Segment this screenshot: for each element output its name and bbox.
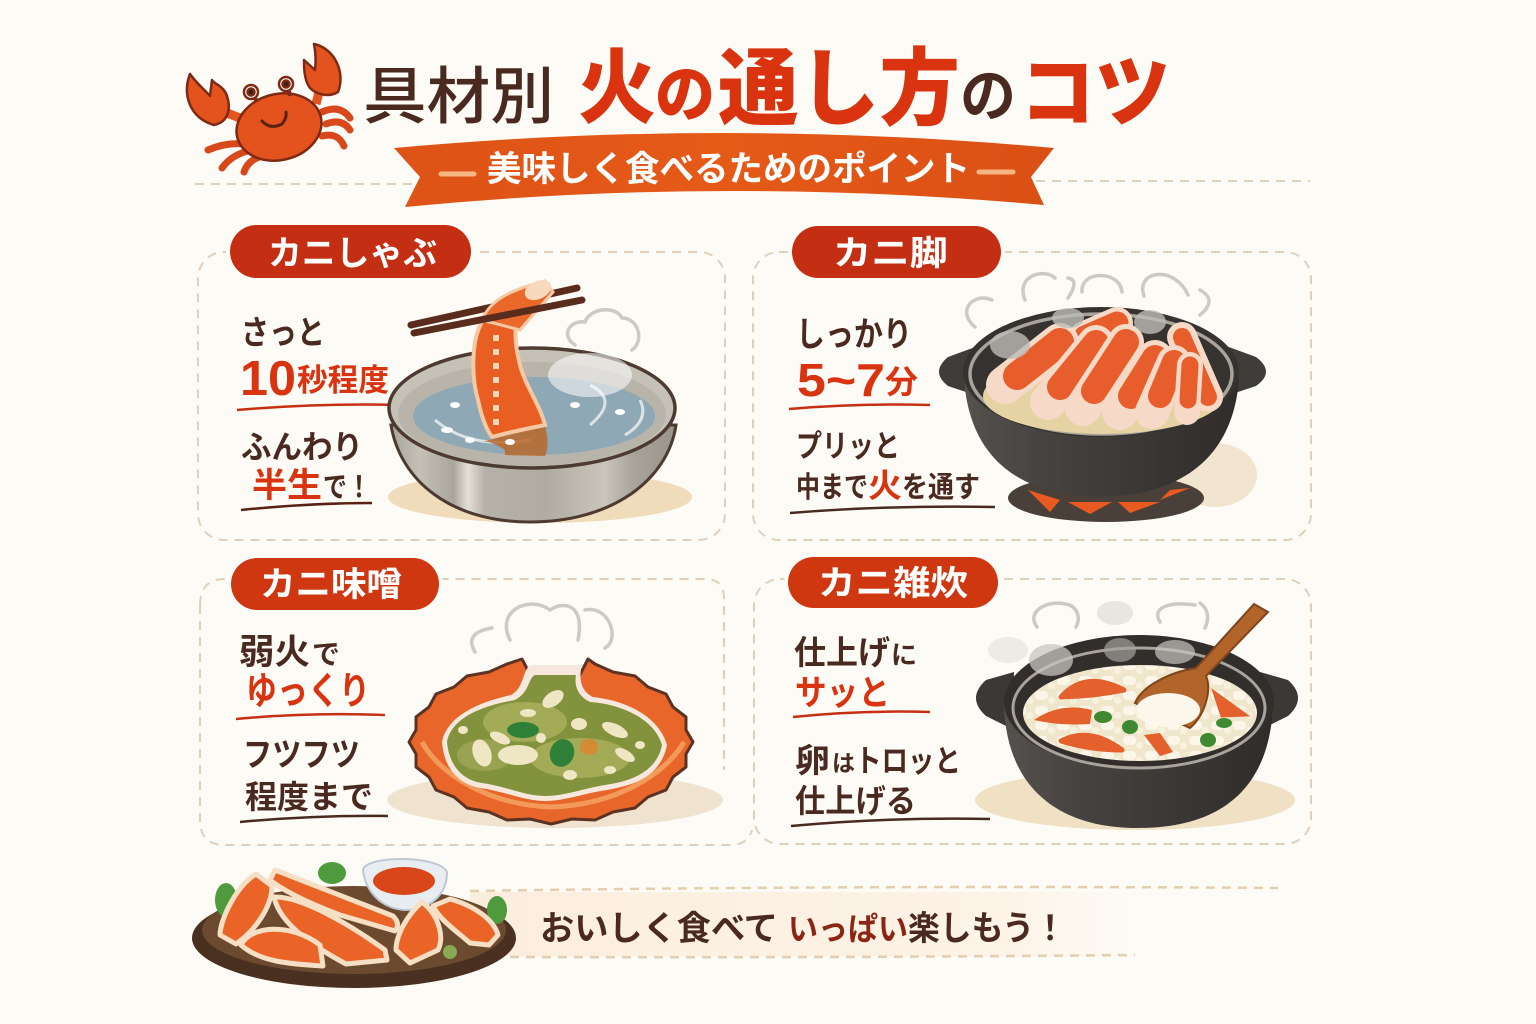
pill heading: カニ雑炊 <box>818 565 968 603</box>
tip text: ふんわり <box>241 429 363 465</box>
time text: 10 <box>240 352 296 406</box>
time text: に <box>891 640 917 670</box>
panel: カニしゃぶ <box>198 225 725 540</box>
time text: で <box>312 639 340 670</box>
time text <box>236 633 385 719</box>
title <box>363 42 1170 137</box>
footer message <box>540 910 1066 948</box>
time text: 仕上げ <box>794 634 890 671</box>
illustration: stone pot with rice porridge and wooden spoon <box>975 601 1298 830</box>
tip text: 程度まで <box>245 779 373 815</box>
footer band <box>470 887 1278 957</box>
panel: カニ味噌 <box>200 558 752 845</box>
footer message: いっぱい <box>788 911 908 947</box>
time text: しっかり <box>796 316 912 354</box>
time text <box>793 634 930 717</box>
time text <box>237 314 402 410</box>
tip text: を通す <box>902 471 980 504</box>
footer message: 楽しもう！ <box>908 910 1066 948</box>
tip text <box>240 736 388 822</box>
time text: サッと <box>795 674 890 713</box>
dashed rule left of banner <box>195 183 418 185</box>
tip text: 半生 <box>252 467 322 505</box>
pill heading: カニ脚 <box>833 235 948 273</box>
tip text <box>790 429 995 513</box>
illustration: plate of crab legs <box>192 859 516 988</box>
tip text: は <box>832 750 855 776</box>
tip text <box>791 742 990 826</box>
panel: カニ脚 <box>753 226 1311 540</box>
time text <box>789 316 930 409</box>
tip text <box>241 429 372 510</box>
illustration: bowl with crab leg and chopsticks <box>388 276 692 523</box>
time text: さっと <box>241 314 325 351</box>
pill heading <box>792 226 1001 278</box>
panel: カニ雑炊 <box>754 557 1311 844</box>
title: の <box>655 61 715 130</box>
illustration: stone pot with crab legs <box>939 274 1266 522</box>
dashed rule right of banner <box>1036 180 1310 182</box>
time text: 弱火 <box>239 633 310 672</box>
title: コツ <box>1020 49 1170 137</box>
tip text: 仕上げる <box>795 783 916 819</box>
tip text: 中まで <box>796 471 868 504</box>
title: の <box>960 64 1016 129</box>
tip text: フツフツ <box>243 736 360 773</box>
illustration: crab shell with miso <box>387 604 723 828</box>
tip text: トロッと <box>855 744 961 779</box>
time text: ゆっくり <box>246 671 370 713</box>
tip text: で！ <box>323 472 371 504</box>
pill heading: カニしゃぶ <box>268 235 437 273</box>
icon: crab mascot <box>187 44 350 172</box>
banner text: 美味しく食べるためのポイント <box>487 150 970 189</box>
pill heading <box>231 558 439 610</box>
time text: 分 <box>885 364 918 400</box>
tip text: 卵 <box>795 742 830 779</box>
time text: 5~7 <box>797 354 885 406</box>
title: 火 <box>578 43 656 134</box>
pill heading: カニ味噌 <box>260 566 402 604</box>
tip text: プリッと <box>796 429 900 464</box>
title: 具材別 <box>363 63 554 132</box>
pill heading <box>788 557 998 608</box>
banner ribbon <box>394 133 1054 207</box>
pill heading <box>230 225 471 278</box>
tip text: 火 <box>868 467 902 504</box>
title: 通し方 <box>718 42 960 136</box>
footer message: おいしく食べて <box>540 910 778 948</box>
time text: 秒程度 <box>297 363 389 398</box>
